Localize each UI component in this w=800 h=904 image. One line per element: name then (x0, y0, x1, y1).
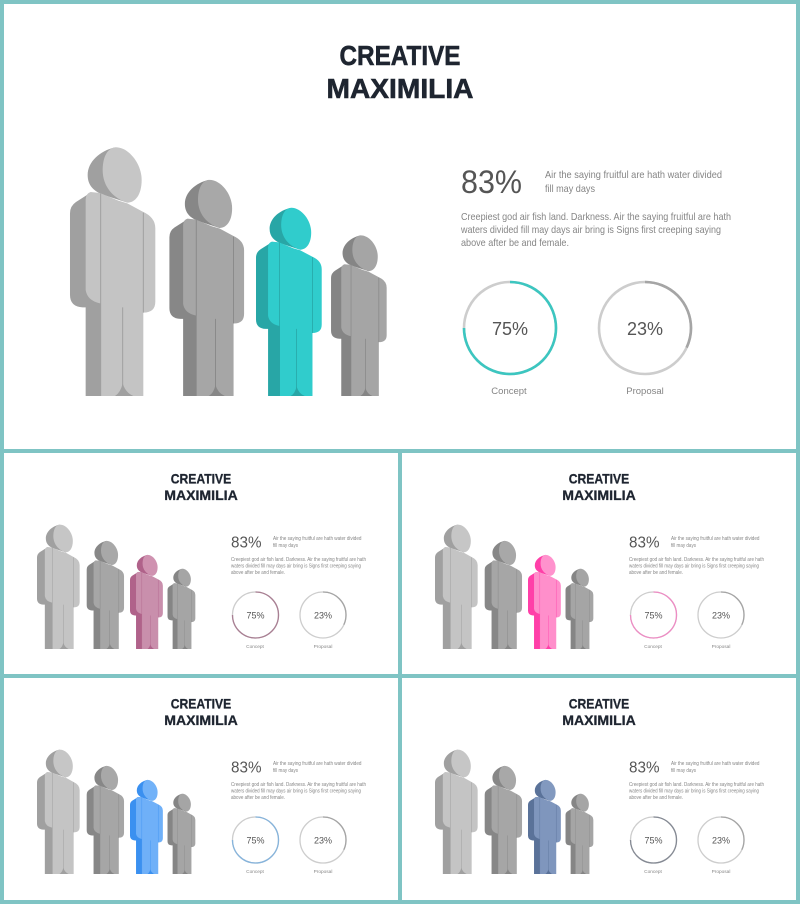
title (164, 696, 238, 728)
donut: concept 75%: Concept (491, 386, 527, 397)
stat: 83%: 83% (629, 534, 660, 552)
people chart (435, 750, 593, 874)
stat description: Air the saying fruitful are hath water divided (545, 169, 722, 181)
donut: concept 75%: Concept (644, 869, 663, 875)
stat description: fill may days (273, 543, 298, 549)
donut: proposal 23%: Proposal (626, 386, 664, 397)
title: CREATIVE (569, 696, 629, 712)
stat description: Air the saying fruitful are hath water divided (671, 761, 760, 767)
donut: proposal 23%: Proposal (712, 644, 730, 650)
donut: concept 75% (232, 817, 278, 875)
donut: concept 75%: 75% (644, 836, 663, 846)
panel: main teal slide (4, 4, 796, 449)
donut: proposal 23% (300, 592, 346, 650)
paragraph: waters divided fill may days air bring is Signs first creeping saying (231, 564, 361, 570)
stat description (545, 169, 722, 195)
people chart (37, 525, 195, 649)
stat description (273, 536, 362, 549)
stats column (629, 534, 764, 650)
donut: proposal 23%: Proposal (712, 869, 730, 875)
donut: concept 75% (630, 817, 676, 875)
paragraph: waters divided fill may days air bring is Signs first creeping saying (629, 564, 759, 570)
stat description: fill may days (545, 183, 595, 195)
stat description (273, 761, 362, 774)
donut: concept 75%: 75% (246, 836, 265, 846)
donut: proposal 23% (300, 817, 346, 875)
donut: concept 75%: Concept (246, 644, 265, 650)
stat description: fill may days (273, 768, 298, 774)
donut: concept 75%: 75% (492, 319, 528, 339)
stat: 83%: 83% (629, 760, 660, 776)
stat: 83%: 83% (461, 164, 522, 200)
donut: proposal 23%: 23% (314, 836, 332, 846)
title: CREATIVE (340, 40, 460, 71)
donut: concept 75%: Concept (246, 869, 265, 875)
paragraph (629, 782, 764, 801)
panel: blue slide (4, 678, 398, 900)
people chart (70, 147, 387, 396)
title: MAXIMILIA (164, 712, 238, 728)
title: CREATIVE (569, 470, 629, 486)
title: CREATIVE (171, 470, 231, 486)
panel: slate slide (402, 678, 796, 900)
stats column (231, 760, 366, 875)
donut: proposal 23% (698, 817, 744, 875)
panel: pink slide (402, 453, 796, 674)
paragraph: above after be and female. (629, 570, 683, 576)
stat description: fill may days (671, 768, 696, 774)
donut: concept 75%: 75% (246, 610, 265, 620)
donut: proposal 23% (698, 592, 744, 650)
stat description: Air the saying fruitful are hath water divided (273, 536, 362, 542)
paragraph (231, 782, 366, 801)
donut: concept 75%: 75% (644, 610, 663, 620)
paragraph: Creepiest god air fish land. Darkness. Air the saying fruitful are hath (231, 557, 366, 563)
title (562, 470, 636, 503)
title (164, 470, 238, 503)
stat description (671, 536, 760, 549)
paragraph (629, 557, 764, 576)
donut: proposal 23%: 23% (712, 610, 730, 620)
title (326, 40, 474, 104)
stat description: fill may days (671, 543, 696, 549)
paragraph (460, 211, 731, 249)
title: MAXIMILIA (562, 712, 636, 728)
paragraph: above after be and female. (629, 795, 683, 801)
paragraph: above after be and female. (231, 795, 285, 801)
donut: proposal 23%: Proposal (314, 869, 332, 875)
stat: 83%: 83% (231, 760, 262, 776)
title: CREATIVE (171, 696, 231, 712)
donut: proposal 23%: 23% (712, 836, 730, 846)
paragraph: above after be and female. (231, 570, 285, 576)
people chart (435, 525, 593, 649)
donut: proposal 23%: Proposal (314, 644, 332, 650)
donut: proposal 23%: 23% (627, 319, 663, 339)
donut: proposal 23% (599, 282, 691, 397)
donut: concept 75% (232, 592, 278, 650)
donut: concept 75% (630, 592, 676, 650)
title: MAXIMILIA (164, 487, 238, 503)
title: MAXIMILIA (562, 487, 636, 503)
paragraph: Creepiest god air fish land. Darkness. Air the saying fruitful are hath (231, 782, 366, 788)
paragraph: waters divided fill may days air bring is Signs first creeping saying (460, 224, 721, 236)
paragraph (231, 557, 366, 576)
stat description: Air the saying fruitful are hath water divided (273, 761, 362, 767)
paragraph: Creepiest god air fish land. Darkness. Air the saying fruitful are hath (629, 782, 764, 788)
donut: concept 75%: Concept (644, 644, 663, 650)
stat description (671, 761, 760, 774)
stat description: Air the saying fruitful are hath water divided (671, 536, 760, 542)
paragraph: above after be and female. (461, 237, 569, 249)
paragraph: waters divided fill may days air bring is Signs first creeping saying (231, 788, 361, 794)
title: MAXIMILIA (326, 73, 474, 104)
stats column (629, 760, 764, 875)
paragraph: Creepiest god air fish land. Darkness. Air the saying fruitful are hath (629, 557, 764, 563)
stats column (231, 534, 366, 650)
paragraph: Creepiest god air fish land. Darkness. Air the saying fruitful are hath (461, 211, 731, 223)
paragraph: waters divided fill may days air bring is Signs first creeping saying (629, 788, 759, 794)
stat: 83%: 83% (231, 534, 262, 552)
donut: concept 75% (464, 282, 556, 397)
people chart (37, 750, 195, 874)
donut: proposal 23%: 23% (314, 610, 332, 620)
title (562, 696, 636, 728)
panel: mauve slide (4, 453, 398, 674)
